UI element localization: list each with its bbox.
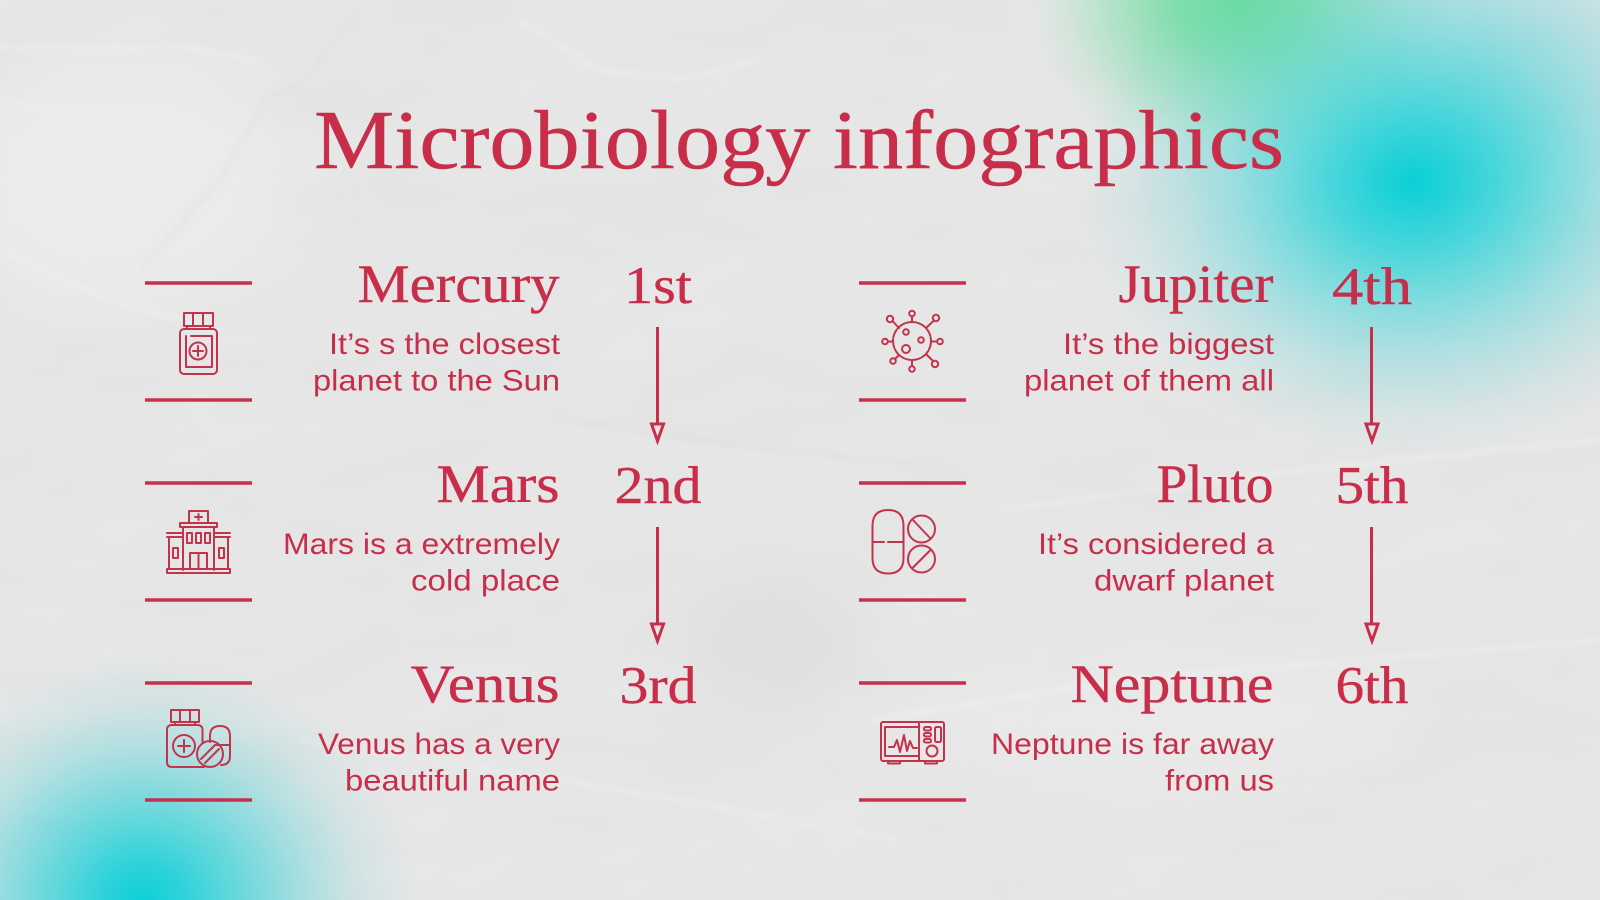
description: Neptune: Neptune is far away — [991, 728, 1274, 761]
description: Jupiter: planet of them all — [1024, 364, 1274, 398]
ordinal: 2nd: 2nd — [614, 457, 702, 515]
arrow: down to 5th — [1366, 327, 1378, 441]
ordinal: 6th: 6th — [1336, 657, 1408, 715]
icon: monitoring device — [881, 722, 944, 764]
divider lines — [859, 683, 966, 800]
heading: Jupiter: Jupiter — [1118, 254, 1274, 314]
icon: capsule and tablets — [872, 510, 935, 574]
panel: Mars — [145, 454, 702, 641]
heading: Pluto: Pluto — [1156, 454, 1274, 514]
icon: hospital — [167, 511, 230, 573]
description: Pluto: dwarf planet — [1094, 564, 1275, 598]
heading: Venus: Venus — [410, 654, 560, 714]
description: Mars: Mars is a extremely — [283, 528, 560, 561]
ordinal: 3rd: 3rd — [620, 657, 696, 715]
description: Mars — [283, 528, 560, 598]
description: Neptune: from us — [1165, 764, 1274, 798]
description: Pluto: It’s considered a — [1038, 528, 1274, 561]
panel: Jupiter — [859, 254, 1412, 441]
panel: Neptune — [859, 654, 1408, 800]
icon: virus — [882, 311, 943, 372]
description: Neptune — [991, 728, 1274, 798]
description: Pluto — [1038, 528, 1275, 598]
divider lines — [145, 483, 252, 600]
divider lines — [859, 483, 966, 600]
title: Microbiology infographics — [314, 94, 1284, 187]
arrow: down to 6th — [1366, 527, 1378, 641]
divider lines — [145, 683, 252, 800]
heading: Mars: Mars — [436, 454, 560, 514]
description: Venus — [318, 728, 560, 798]
arrow: down to 3rd — [652, 527, 664, 641]
description: Mercury — [313, 328, 561, 398]
description: Mercury: It’s s the closest — [329, 328, 561, 361]
ordinal: 1st: 1st — [624, 257, 692, 315]
panel: Venus — [145, 654, 696, 800]
divider lines — [145, 283, 252, 400]
heading: Neptune: Neptune — [1070, 654, 1274, 714]
icon: medicine bottle — [180, 313, 217, 374]
description: Jupiter: It’s the biggest — [1063, 328, 1275, 361]
description: Jupiter — [1024, 328, 1275, 398]
description: Mars: cold place — [411, 564, 560, 598]
description: Venus: beautiful name — [345, 764, 560, 798]
heading: Mercury: Mercury — [358, 254, 560, 314]
ordinal: 5th: 5th — [1336, 457, 1408, 515]
divider lines — [859, 283, 966, 400]
icon: medicine and pills — [167, 710, 230, 767]
panel: Mercury — [145, 254, 692, 441]
description: Mercury: planet to the Sun — [313, 364, 560, 398]
ordinal: 4th: 4th — [1332, 258, 1412, 316]
panel: Pluto — [859, 454, 1408, 641]
description: Venus: Venus has a very — [318, 728, 560, 761]
arrow: down to 2nd — [652, 327, 664, 441]
